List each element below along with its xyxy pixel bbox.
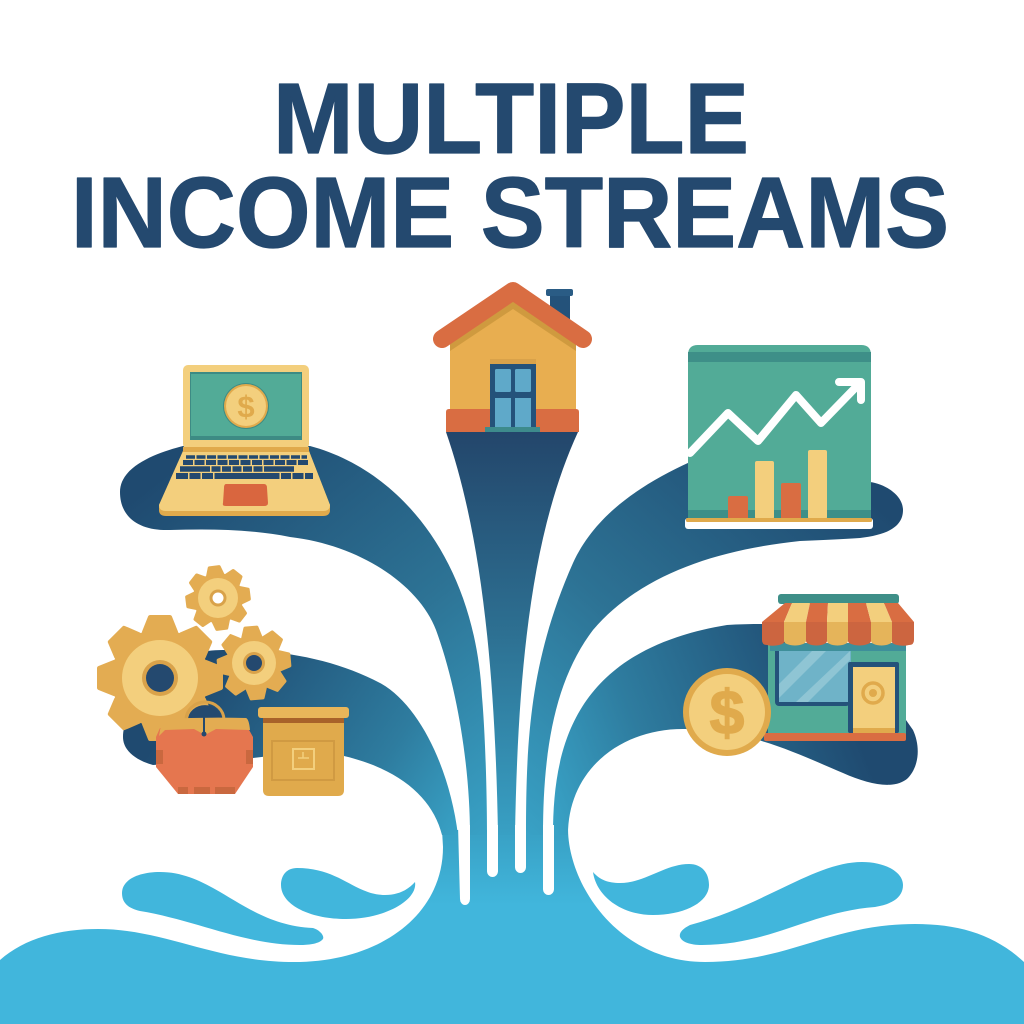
title: INCOME STREAMS (71, 157, 949, 269)
stream to gears and goods (123, 650, 458, 835)
stream to store (553, 624, 918, 835)
water pool with splashes (0, 830, 1024, 1024)
icon: growth chart board (685, 345, 873, 529)
large gear (99, 617, 221, 739)
stream to laptop (120, 446, 487, 835)
striped awning (762, 603, 914, 646)
stream to house (446, 432, 578, 835)
icon: dollar coin (683, 668, 771, 756)
icon: laptop (159, 365, 330, 516)
title (71, 63, 949, 269)
medium gear (216, 625, 292, 701)
white gaps between streams (458, 825, 554, 905)
icon: cardboard box (258, 707, 349, 796)
icon: dollar coin: $ (710, 679, 744, 748)
icon: laptop: $ (237, 389, 255, 424)
title: MULTIPLE (273, 63, 749, 175)
icon: storefront (762, 594, 914, 741)
icon: house (442, 289, 583, 432)
icon: shopping bag (156, 702, 253, 794)
rising line arrow (690, 382, 861, 453)
stream to chart (526, 462, 903, 835)
small gear (183, 563, 253, 633)
icon: gears (99, 563, 292, 739)
